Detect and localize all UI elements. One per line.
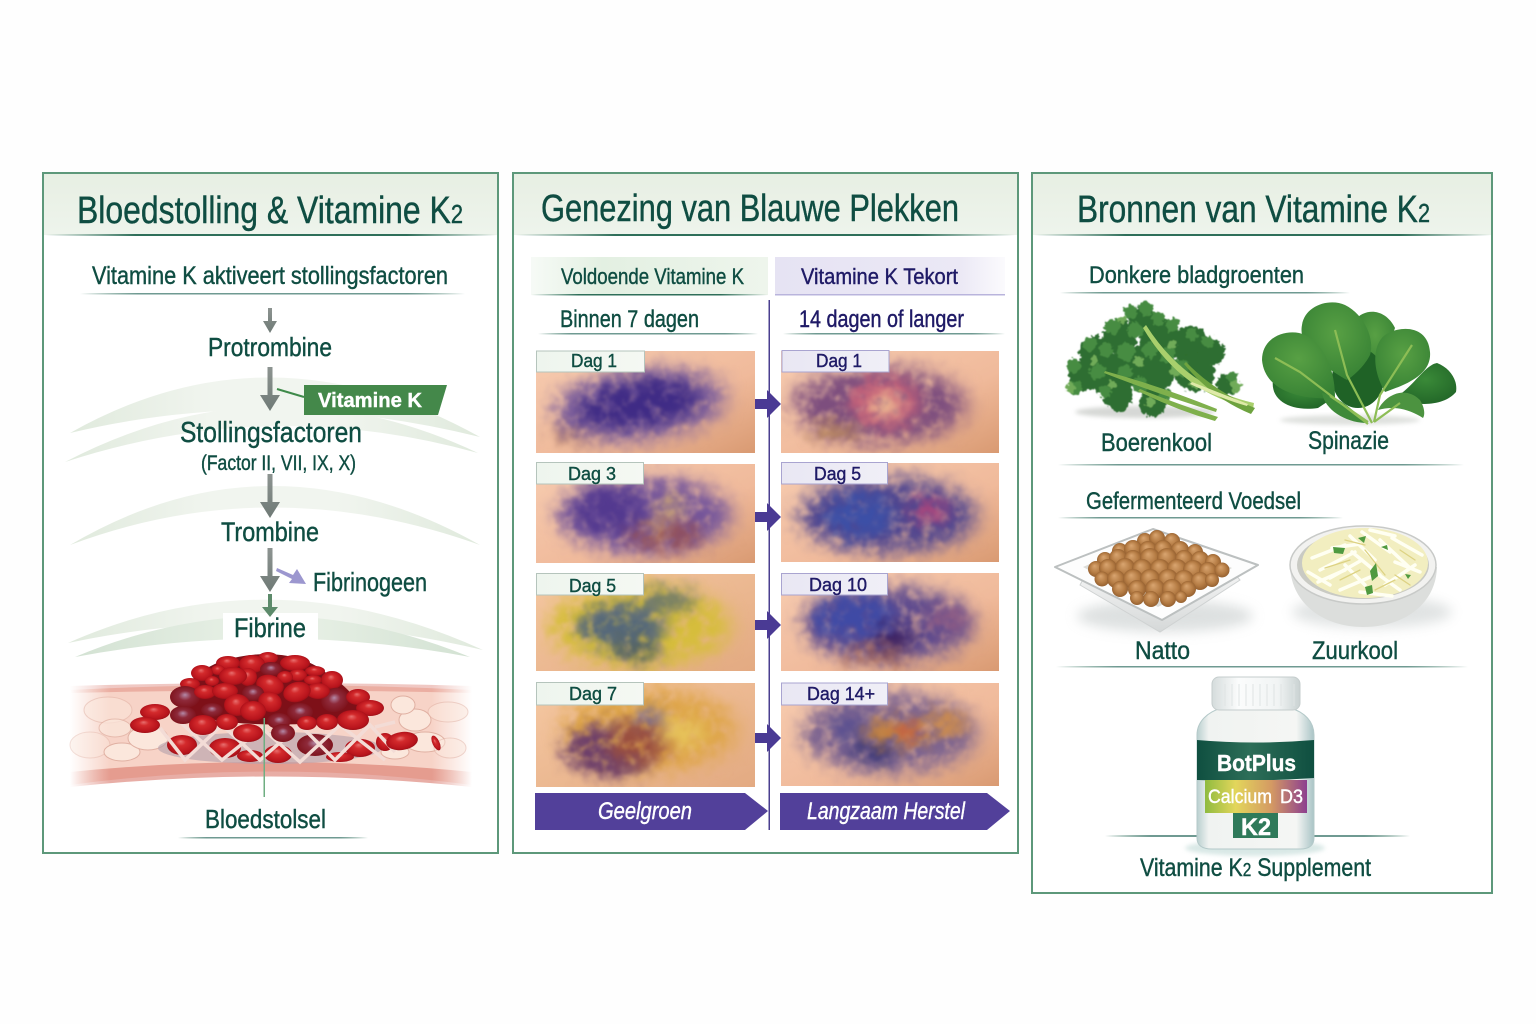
label: Zuurkool: Zuurkool [1312, 637, 1398, 665]
timeline divider [768, 300, 770, 830]
label: BotPlus [1197, 740, 1314, 781]
bottle cap [1212, 677, 1300, 710]
arrow: trombine to fibrine [260, 548, 280, 592]
heading: Genezing van Blauwe Plekken [541, 188, 959, 230]
label: Calcium D3: D3 [1280, 787, 1303, 808]
label: Boerenkool: Boerenkool [1101, 429, 1212, 457]
column header: tekort [775, 257, 1005, 296]
column header: tekort: Vitamine K Tekort [801, 264, 958, 289]
illustration: boerenkool [1066, 301, 1255, 421]
day tags: left: Dag 1 [571, 350, 617, 371]
banner: Geelgroen: Geelgroen [598, 798, 692, 825]
column header: voldoende [531, 257, 768, 296]
day tags: left: Dag 7 [569, 683, 617, 704]
label: Calcium D3: Calcium [1208, 787, 1272, 808]
arrow: to fibrine [262, 594, 278, 617]
label: K2 [1233, 813, 1278, 841]
photo: left day 5 [536, 574, 755, 671]
arrow: factoren to trombine [260, 474, 280, 518]
illustration: natto [1055, 529, 1258, 632]
day tags: left [536, 350, 644, 705]
photo: right day 5 [781, 463, 999, 562]
arrow: protrombine in [263, 308, 277, 333]
panel header band [514, 174, 1017, 235]
photo: right day 14+ [781, 683, 999, 786]
photo: right day 1 [781, 351, 999, 453]
label: Spinazie: Spinazie [1308, 427, 1389, 455]
day tags: left: Dag 5 [569, 575, 616, 596]
background swooshes [65, 377, 483, 657]
panel: genezing [513, 173, 1018, 853]
heading: Bronnen van Vitamine K2 [1077, 189, 1430, 231]
vessel [70, 683, 472, 787]
arrow: fibrinogeen [276, 568, 306, 584]
subheading: gefermenteerd: Gefermenteerd Voedsel [1086, 488, 1301, 515]
panel header band [1033, 174, 1491, 235]
caption: supplement: Vitamine K2 Supplement [1140, 854, 1371, 882]
panel header band [44, 174, 497, 235]
subheading: 14 dagen of langer: 14 dagen of langer [799, 306, 964, 333]
label: Fibrinogeen: Fibrinogeen [313, 567, 427, 597]
intro text: Vitamine K aktiveert stollingsfactoren [92, 262, 448, 290]
subheading: bladgroenten: Donkere bladgroenten [1089, 262, 1304, 289]
illustration: blood clot in vessel [70, 652, 472, 797]
label: BotPlus: BotPlus [1217, 750, 1296, 776]
photo: left day 3 [536, 464, 755, 563]
subheading: binnen 7 dagen: Binnen 7 dagen [560, 306, 699, 333]
panel: bronnen [1032, 173, 1492, 893]
tag: Vitamine K [277, 385, 447, 415]
panel: bloedstolling [43, 173, 498, 853]
column header: voldoende: Voldoende Vitamine K [561, 264, 744, 289]
banner: Langzaam Herstel [780, 793, 1010, 830]
label: Bloedstolsel: Bloedstolsel [205, 804, 326, 834]
illustration: spinazie [1262, 302, 1456, 425]
photo: left day 7 [536, 683, 755, 787]
illustration: zuurkool [1290, 526, 1452, 628]
label: Calcium D3 [1205, 780, 1307, 813]
day tags: right [782, 350, 889, 705]
label: Natto: Natto [1135, 637, 1190, 665]
day tags: left: Dag 3 [568, 463, 616, 484]
label: Protrombine: Protrombine [208, 332, 332, 362]
photo: right day 10 [781, 573, 999, 671]
day tags: right: Dag 10 [809, 574, 867, 595]
day tags: right: Dag 1 [816, 350, 862, 371]
label: Fibrine: Fibrine [234, 613, 306, 643]
arrows between columns [755, 390, 781, 752]
banner: Geelgroen [535, 793, 768, 830]
label: K2: K2 [1241, 814, 1271, 841]
day tags: right: Dag 5 [814, 463, 861, 484]
photo: left day 1 [536, 351, 755, 453]
label: factors: (Factor II, VII, IX, X) [201, 452, 356, 475]
label: Trombine: Trombine [221, 517, 319, 547]
tag: Vitamine K: Vitamine K [318, 390, 423, 412]
pointer line [264, 718, 265, 797]
banner: Langzaam Herstel: Langzaam Herstel [807, 798, 966, 825]
red blood cells [130, 652, 384, 742]
fibrin mesh and trapped cells [158, 722, 443, 764]
label: Stollingsfactoren: Stollingsfactoren [180, 417, 362, 449]
heading: Bloedstolling & Vitamine K2 [77, 190, 463, 232]
arrow: protrombine to stollingsfactoren [260, 367, 280, 411]
illustration: supplement bottle [1105, 677, 1410, 856]
kale stems [1104, 325, 1255, 421]
day tags: right: Dag 14+ [807, 683, 875, 704]
